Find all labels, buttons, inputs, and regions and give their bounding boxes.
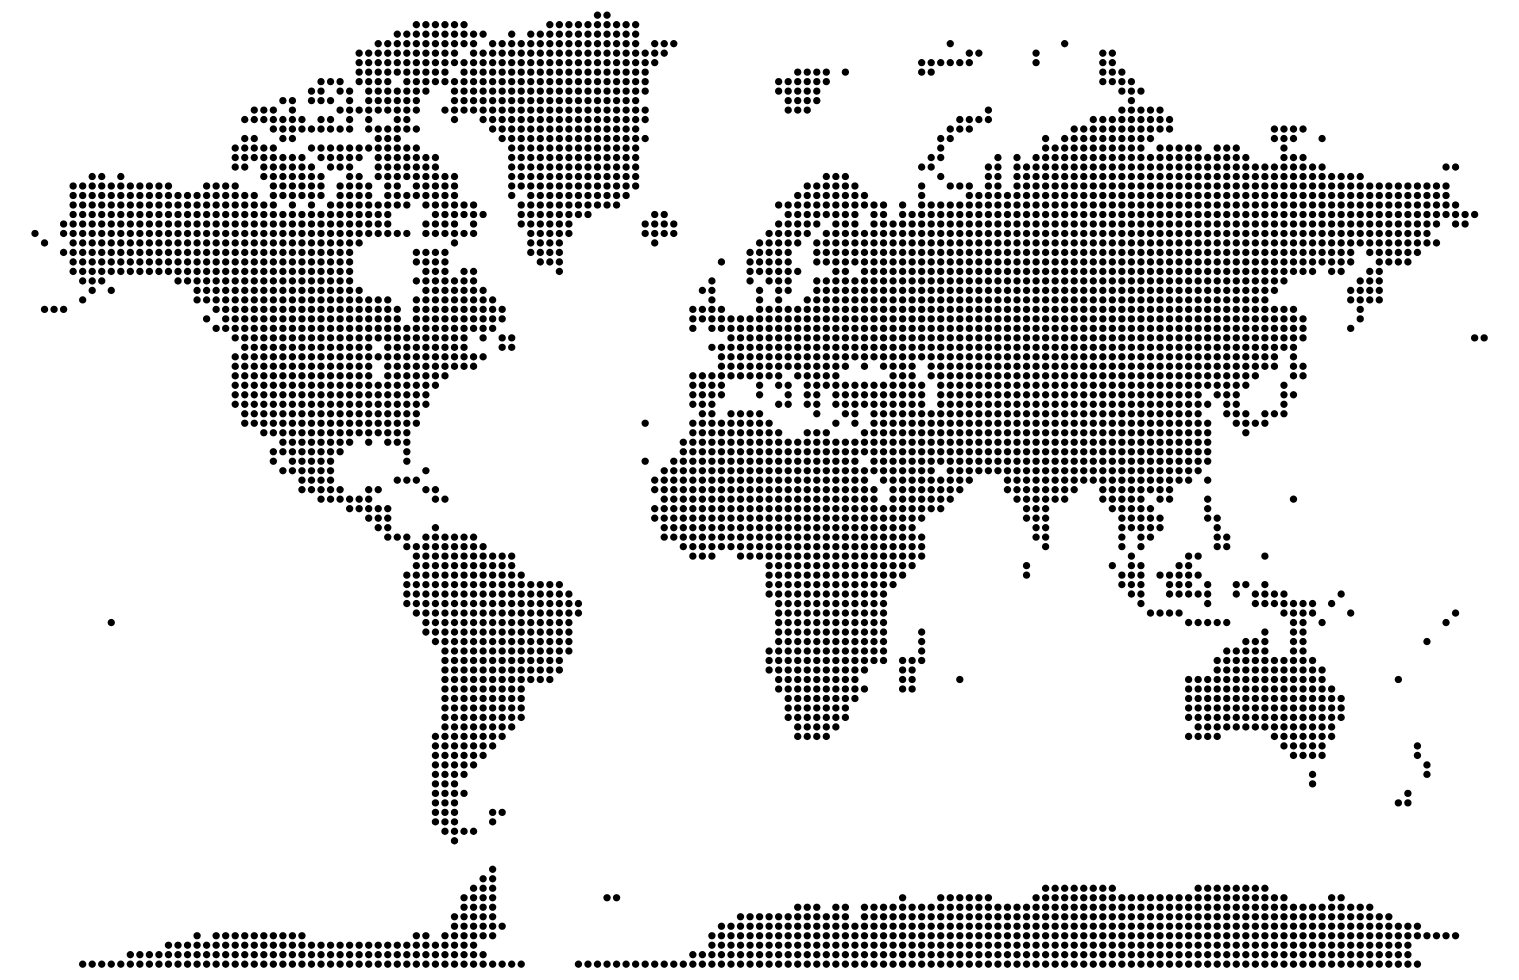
islands: Arctic archipelagos	[922, 44, 1065, 167]
island: Svalbard	[779, 72, 845, 110]
island: Madagascar	[903, 632, 922, 689]
island: Iceland	[645, 214, 674, 243]
landmass: Eurasia and Africa	[655, 53, 1475, 736]
landmass: North America	[35, 25, 512, 537]
islands: New Zealand	[1398, 746, 1427, 803]
islands: scattered oceanic dots	[111, 338, 1484, 898]
landmass: Antarctica	[83, 869, 1456, 964]
islands: Southeast Asia	[1112, 556, 1351, 623]
landmass: Greenland	[502, 15, 674, 271]
landmass: South America	[407, 528, 579, 841]
landmass: Australia	[1189, 623, 1341, 784]
